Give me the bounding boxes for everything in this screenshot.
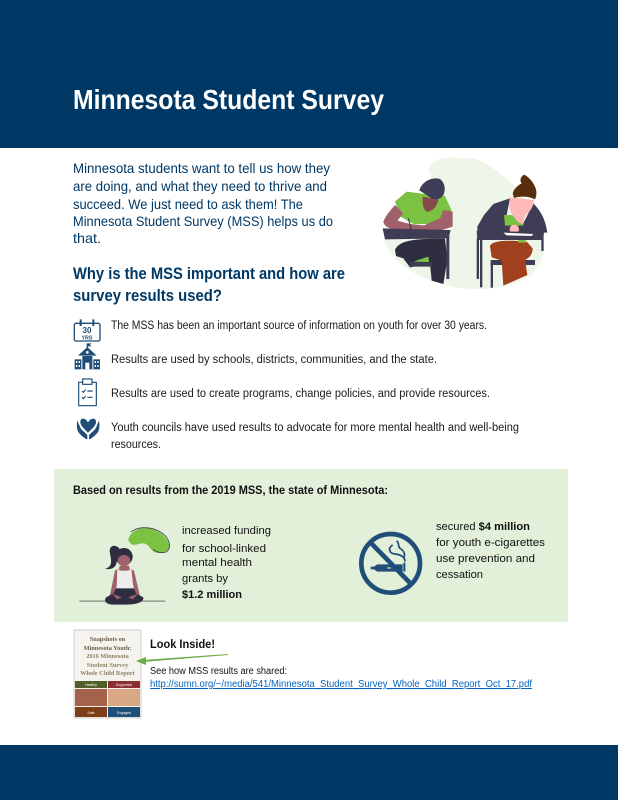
- report cover thumbnail: Minnesota Youth:: [84, 645, 131, 652]
- icon: no smoking: [361, 534, 420, 593]
- icon: hands holding heart: [77, 419, 99, 439]
- footer band: [0, 745, 618, 800]
- panel: 2019 results: [54, 469, 568, 622]
- list text: Results are used by schools, districts, communities, and the state.: [111, 354, 437, 366]
- text: funding: mental health: [182, 557, 252, 569]
- list text: resources.: [111, 439, 161, 451]
- woman: pants: [490, 241, 533, 286]
- arrow: pointing to report: [136, 654, 228, 665]
- text: funding: [182, 525, 271, 601]
- look inside description: See how MSS results are shared:: [150, 666, 287, 677]
- text: funding: $1.2 million: [182, 589, 242, 601]
- text: funding: grants by: [182, 573, 229, 585]
- intro text: Minnesota Student Survey (MSS) helps us do: [73, 213, 333, 229]
- text: funding: for school-linked: [182, 543, 266, 555]
- text: funding: increased funding: [182, 525, 271, 537]
- text: e-cigarettes: cessation: [436, 569, 483, 581]
- icon: 30 years calendar: YRS: [82, 335, 93, 341]
- icon: 30 years calendar: [74, 319, 100, 341]
- intro text: succeed. We just need to ask them! The: [73, 196, 303, 212]
- woman: jacket: [477, 198, 547, 233]
- list text: [111, 320, 519, 451]
- list text: The MSS has been an important source of information on youth for over 30 years.: [111, 320, 487, 332]
- icon: checklist clipboard: [79, 379, 96, 406]
- title: Minnesota Student Survey: [73, 84, 384, 115]
- report link: http://sumn.org/~/media/541/Minnesota_Student_Survey_Whole_Child_Report_Oct_17.pdf: [150, 679, 532, 690]
- intro text: Minnesota students want to tell us how they: [73, 160, 330, 176]
- report cover thumbnail: Supported: [116, 683, 132, 687]
- man: legs: [395, 239, 447, 284]
- report cover thumbnail: Whole Child Report: [80, 670, 136, 677]
- header band: [0, 0, 618, 148]
- illustration: students at desks: [383, 157, 547, 289]
- text: e-cigarettes: [436, 521, 546, 581]
- report cover thumbnail: Snapshots on: [90, 636, 126, 643]
- report cover thumbnail: [74, 630, 141, 718]
- look inside heading: Look Inside!: [150, 637, 215, 651]
- text: e-cigarettes: for youth e-cigarettes: [436, 537, 546, 549]
- list text: Youth councils have used results to advocate for more mental health and well-being: [111, 422, 519, 434]
- intro text: that.: [73, 230, 101, 246]
- intro text: [73, 160, 333, 246]
- intro text: are doing, and what they need to thrive and: [73, 178, 327, 194]
- section heading: [73, 265, 345, 305]
- man: arms: [383, 205, 453, 231]
- list text: Results are used to create programs, change policies, and provide resources.: [111, 388, 490, 400]
- report cover thumbnail: Safe: [87, 711, 95, 715]
- text: e-cigarettes: secured $4 million: [436, 521, 530, 533]
- report cover thumbnail: 2016 Minnesota: [86, 653, 130, 660]
- report cover thumbnail: Healthy: [85, 683, 97, 687]
- section heading: survey results used?: [73, 287, 222, 305]
- man: face and hair: [422, 197, 438, 212]
- report cover thumbnail: Engaged: [117, 711, 131, 715]
- man: shirt: [395, 192, 452, 224]
- icon: school building: [75, 343, 100, 369]
- text: e-cigarettes: use prevention and: [436, 553, 535, 565]
- section heading: Why is the MSS important and how are: [73, 265, 345, 283]
- icon: 30 years calendar: 30: [83, 326, 92, 335]
- panel heading: Based on results from the 2019 MSS, the state of Minnesota:: [73, 485, 388, 497]
- report cover thumbnail: Student Survey: [87, 662, 129, 669]
- illustration: meditating figure: [79, 528, 169, 605]
- woman: chair and desk: [491, 260, 535, 265]
